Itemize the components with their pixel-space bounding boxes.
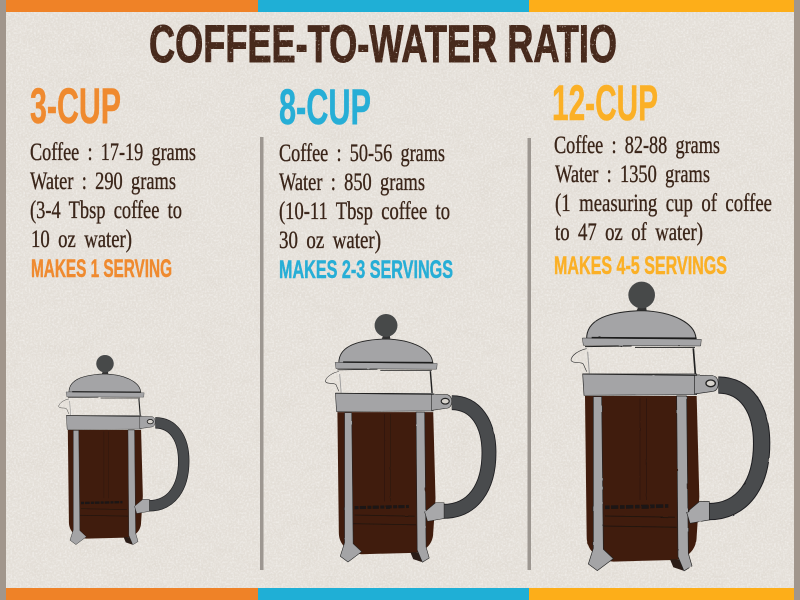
side border left [0, 0, 6, 600]
heading: 8-cup: 8-CUP [279, 79, 371, 135]
side border right [794, 0, 800, 600]
text block: 3-cup ratio [30, 139, 196, 253]
text block: 8-cup ratio: Coffee : 50-56 grams [279, 140, 445, 167]
divider 1 [260, 137, 264, 570]
text block: 12-cup ratio: Coffee : 82-88 grams [554, 132, 720, 159]
text block: 8-cup ratio: Water : 850 grams [279, 169, 425, 196]
icon: 12-cup french press [571, 282, 762, 571]
text block: 3-cup ratio: Coffee : 17-19 grams [30, 139, 196, 166]
text block: 3-cup ratio: Water : 290 grams [30, 168, 176, 195]
text block: 12-cup ratio [554, 132, 772, 246]
text block: 8-cup ratio [279, 140, 450, 254]
bottom colour band [6, 588, 794, 600]
text block: 3-cup ratio: (3-4 Tbsp coffee to [30, 197, 182, 224]
text block: 12-cup ratio: Water : 1350 grams [555, 161, 710, 188]
text block: 8-cup ratio: (10-11 Tbsp coffee to [279, 198, 450, 225]
divider 2 [528, 138, 531, 570]
top colour band [6, 0, 794, 12]
text block: 3-cup ratio: 10 oz water) [31, 226, 132, 253]
heading: 3-cup: 3-CUP [30, 78, 121, 134]
icon: 8-cup french press [325, 314, 489, 562]
text block: 12-cup ratio: to 47 oz of water) [555, 219, 703, 246]
heading: 12-cup: 12-CUP [552, 75, 658, 131]
servings: 3-cup: MAKES 1 SERVING [31, 255, 172, 283]
text block: 8-cup ratio: 30 oz water) [279, 227, 381, 254]
panel: 8-cup [279, 79, 489, 562]
panel: 12-cup [552, 75, 772, 571]
panel: 3-cup [30, 78, 196, 545]
servings: 8-cup: MAKES 2-3 SERVINGS [279, 256, 453, 284]
icon: 3-cup french press [59, 355, 184, 545]
